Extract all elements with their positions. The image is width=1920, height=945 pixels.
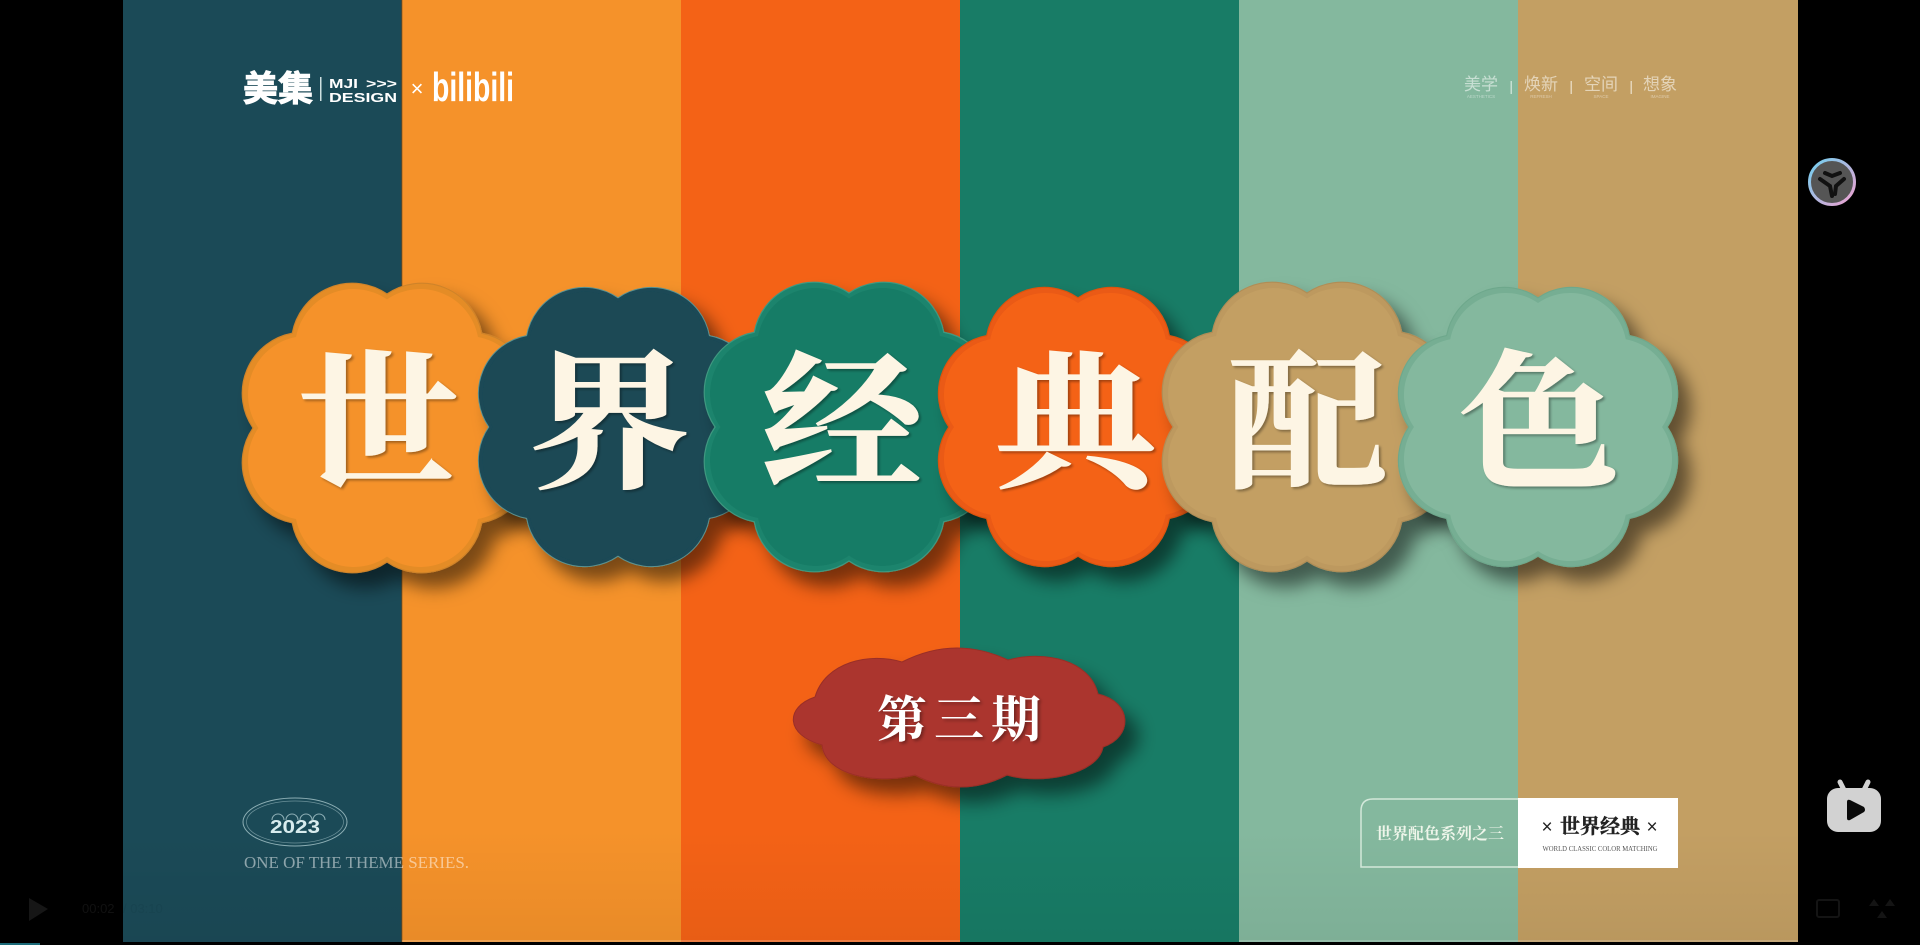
series label card: × [1646,817,1658,838]
flower: 色 [1398,287,1678,567]
top navigation [1464,75,1677,99]
top navigation: 美学 [1464,75,1498,94]
flower: 界: 界 [530,343,690,509]
logo: MJI Design x bilibili: bilibili [432,64,514,110]
icon: bilibili tv logo [1827,782,1881,832]
video controls: / 03:10 [123,901,163,916]
logo: MJI Design x bilibili [243,64,514,110]
series label card: 世界配色系列之三 [1376,824,1504,843]
logo: MJI Design x bilibili: × [411,76,423,101]
year badge: 2023 [243,798,347,846]
series caption: ONE OF THE THEME SERIES. [244,853,469,872]
flower: 世 [242,283,532,573]
flower: 世: 世 [298,343,458,509]
flower: 典: 典 [995,343,1176,509]
video controls: 00:02 [82,901,115,916]
flower: 经: 经 [762,343,927,509]
top navigation: 想象 [1643,75,1677,94]
flower: 配 [1162,282,1452,572]
top navigation: AESTHETICS [1467,94,1495,99]
flower: 界 [478,287,758,567]
series label card: 世界经典 [1560,815,1643,838]
badge: 第三期: 第三期 [877,692,1048,748]
logo: MJI Design x bilibili: MJI [329,76,358,91]
logo: MJI Design x bilibili: >>> [366,76,398,91]
top navigation: 空间 [1584,75,1618,94]
flower: 典 [938,287,1218,567]
logo: MJI Design x bilibili: DESIGN [329,90,397,105]
badge: 第三期 [793,648,1125,787]
year badge: 2023: 2023 [270,817,320,837]
icon: floating assistant button [1810,160,1854,204]
series label card: WORLD CLASSIC COLOR MATCHING [1542,844,1658,853]
flower: 经 [704,282,994,572]
flower: 配: 配 [1227,343,1387,509]
top navigation: IMAGINE [1650,94,1670,99]
video controls [0,898,1895,945]
top navigation: REFRESH [1530,94,1552,99]
top navigation: SPACE [1594,94,1608,99]
series label card [1361,798,1678,868]
logo: MJI Design x bilibili: 美集 [243,70,313,109]
top navigation: 焕新 [1524,75,1558,94]
series label card: × [1541,817,1553,838]
flower: 色: 色 [1459,343,1619,509]
